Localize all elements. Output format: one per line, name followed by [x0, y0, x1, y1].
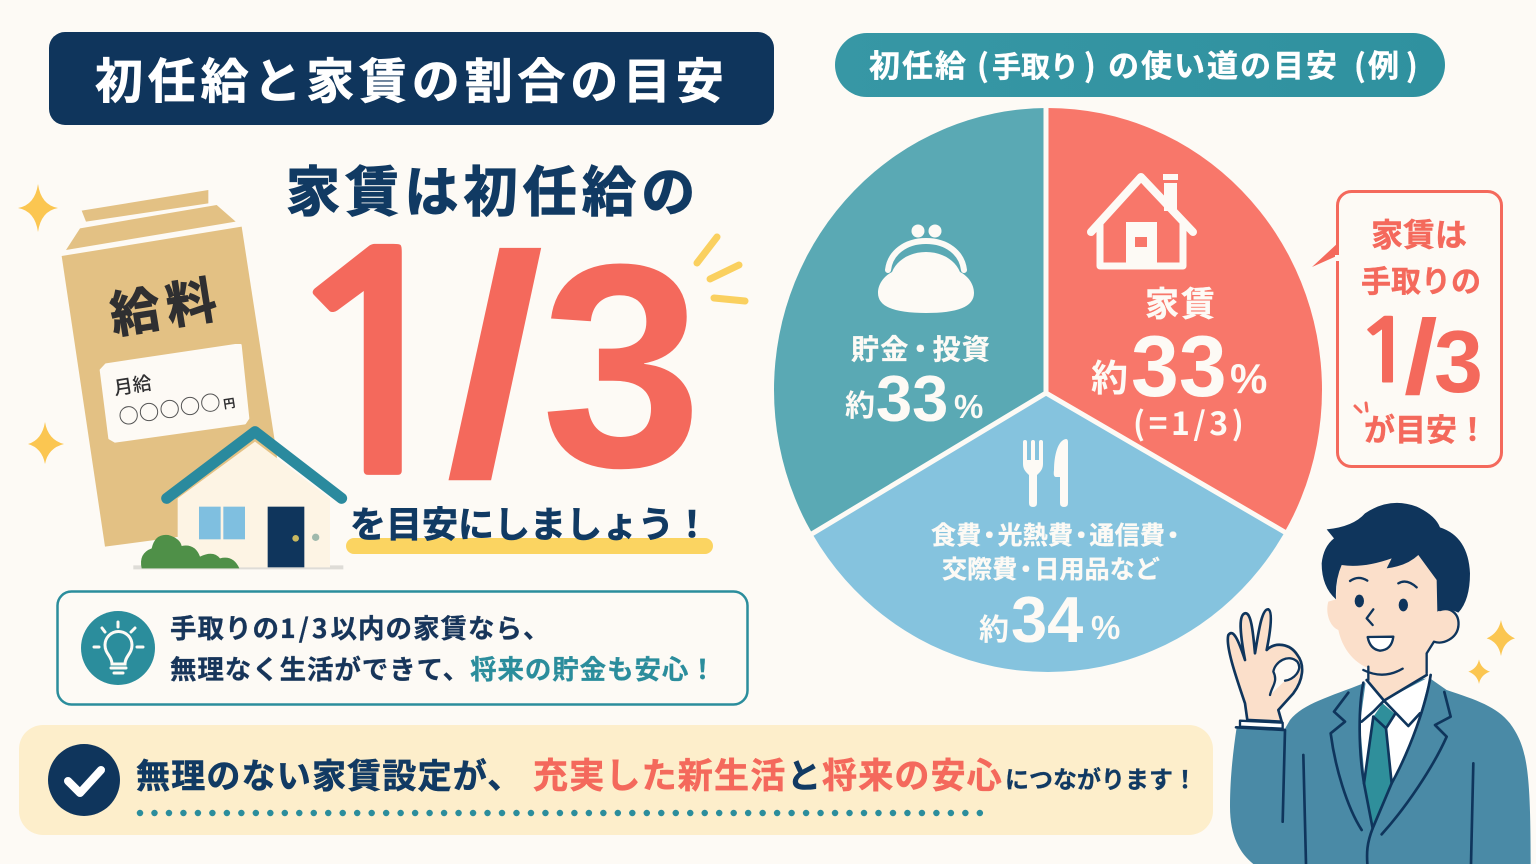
- living costs label: [931, 516, 1186, 586]
- callout: [1312, 192, 1502, 466]
- pie heading: 手取り: [992, 44, 1079, 86]
- banner message: 充実した新生活: [533, 748, 786, 799]
- bush: [141, 535, 239, 568]
- banner message: と: [787, 749, 822, 798]
- pie heading: の使い道の目安: [1108, 41, 1339, 86]
- savings value: 約: [845, 381, 875, 425]
- bottom banner: [19, 725, 1213, 835]
- savings label: 貯金・投資: [851, 328, 991, 368]
- rent label: 家賃: [1145, 277, 1217, 326]
- envelope label: 給料: [104, 259, 228, 348]
- savings value: %: [954, 388, 983, 425]
- callout text: が目安！: [1364, 405, 1488, 450]
- illustration: businessman giving OK sign: [1228, 503, 1531, 864]
- tip box: [58, 592, 748, 704]
- big fraction 1/3: 3: [541, 204, 702, 528]
- icon: purse: [878, 224, 974, 313]
- pay slip amount: [120, 394, 219, 424]
- rent value: [1091, 319, 1267, 415]
- banner message: につながります！: [1005, 760, 1197, 795]
- tip text second line: 無理なく生活ができて、将来の貯金も安心！: [170, 648, 717, 687]
- headline: rent is one third of first salary: [267, 148, 713, 554]
- hair: [1322, 503, 1470, 613]
- shirt: [1360, 677, 1430, 783]
- icon: rent house: [1091, 174, 1193, 268]
- pie heading: (: [1354, 41, 1366, 86]
- tie: [1364, 703, 1395, 827]
- pie heading: (: [977, 41, 989, 86]
- title: 初任給と家賃の割合の目安: [95, 42, 729, 112]
- big fraction 1/3: [267, 193, 702, 541]
- savings value: 33: [876, 362, 948, 435]
- icon: light bulb: [81, 611, 155, 685]
- jacket lines: [1236, 675, 1473, 864]
- big fraction 1/3: 1: [267, 219, 483, 520]
- rent value: 33: [1131, 319, 1227, 415]
- slice: savings: [774, 108, 1044, 532]
- neck and face: [1368, 650, 1427, 701]
- illustration: salary envelope: [62, 190, 280, 547]
- illustration: house: [133, 432, 343, 568]
- shirt cuff: [1240, 721, 1283, 729]
- slice: living costs: [814, 396, 1284, 672]
- icon: fork and knife: [1023, 439, 1068, 507]
- rent value: 約: [1091, 348, 1128, 402]
- callout text: /: [1404, 298, 1438, 415]
- icon: emphasis sparks: [697, 237, 745, 301]
- pay slip text: 月給: [112, 368, 153, 401]
- callout text: 家賃は: [1371, 210, 1467, 256]
- living costs value: 約: [979, 605, 1009, 649]
- living costs value: [979, 583, 1120, 656]
- hand: [1228, 609, 1302, 722]
- icon: check mark: [48, 744, 120, 816]
- tip text: 手取りの1/3以内の家賃なら、: [170, 607, 551, 646]
- big fraction 1/3: /: [445, 193, 546, 541]
- living costs value: 34: [1011, 583, 1083, 656]
- pie heading: 初任給: [869, 41, 968, 86]
- face features: [1350, 578, 1459, 680]
- sparkles: [1468, 620, 1515, 684]
- banner message: 無理のない家賃設定が、: [136, 749, 523, 798]
- savings value: [845, 362, 983, 435]
- living costs value: %: [1091, 609, 1120, 646]
- living costs label: 交際費・日用品など: [942, 550, 1160, 586]
- banner message: 将来の安心: [822, 748, 1003, 799]
- living costs label: 食費・光熱費・通信費・: [931, 516, 1186, 552]
- highlight underline: [346, 538, 713, 554]
- rent value: %: [1230, 355, 1267, 402]
- jacket: [1230, 678, 1531, 864]
- pie heading: ): [1406, 41, 1418, 86]
- title: [49, 32, 774, 125]
- pie heading: [835, 33, 1445, 97]
- headline first line: 家賃は初任給の: [286, 148, 700, 227]
- callout text: 手取りの: [1361, 257, 1481, 301]
- pie heading: ): [1084, 41, 1096, 86]
- rent fraction note: (=1/3): [1133, 399, 1247, 445]
- callout text: 1: [1354, 308, 1416, 396]
- pie chart: [774, 100, 1322, 672]
- pie heading: 例: [1368, 41, 1399, 86]
- headline last line: を目安にしましょう！: [350, 496, 710, 548]
- illustration: salary envelope: 円: [222, 394, 236, 413]
- callout text: [1354, 210, 1488, 450]
- slice: rent: [1048, 108, 1322, 530]
- icon: sparkles left: [18, 184, 64, 464]
- callout text: 3: [1434, 312, 1483, 411]
